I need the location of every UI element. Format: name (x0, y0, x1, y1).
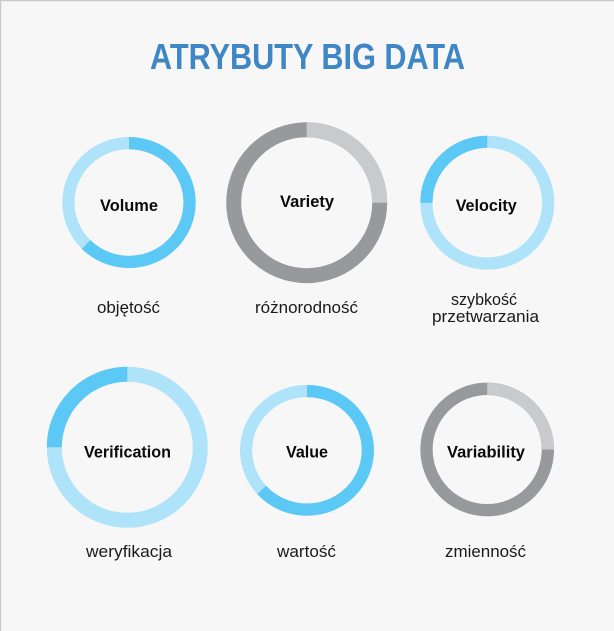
panel: Velocity (426, 142, 548, 326)
label: Variety: Variety (280, 192, 335, 211)
donut: Verification (54, 374, 200, 520)
panel: Verification (54, 374, 200, 561)
label: Variability: Variability (447, 442, 526, 462)
panel: Value (246, 391, 368, 561)
panel: Volume (68, 143, 190, 317)
caption: weryfikacja: weryfikacja (85, 542, 173, 561)
caption: wartość: wartość (276, 542, 336, 561)
label: Verification: Verification (84, 442, 171, 462)
caption: objętość: objętość (97, 298, 160, 317)
caption: szybkość przetwarzania (432, 290, 540, 326)
donut: Variety (234, 130, 380, 276)
donut: Velocity (426, 142, 548, 264)
label: Velocity: Velocity (456, 196, 517, 215)
label: Volume: Volume (100, 196, 158, 215)
donut: Value (246, 391, 368, 510)
caption: zmienność: zmienność (445, 542, 526, 561)
panel: Variability (426, 389, 548, 561)
donut: Variability (426, 389, 548, 510)
label: Value: Value (286, 442, 328, 462)
caption: szybkość przetwarzania: szybkość (451, 290, 517, 309)
caption: szybkość przetwarzania: przetwarzania (432, 307, 540, 326)
title: ATRYBUTY BIG DATA (150, 36, 465, 77)
caption: różnorodność: różnorodność (255, 298, 358, 317)
panel: Variety (234, 130, 380, 317)
donut: Volume (68, 143, 190, 262)
